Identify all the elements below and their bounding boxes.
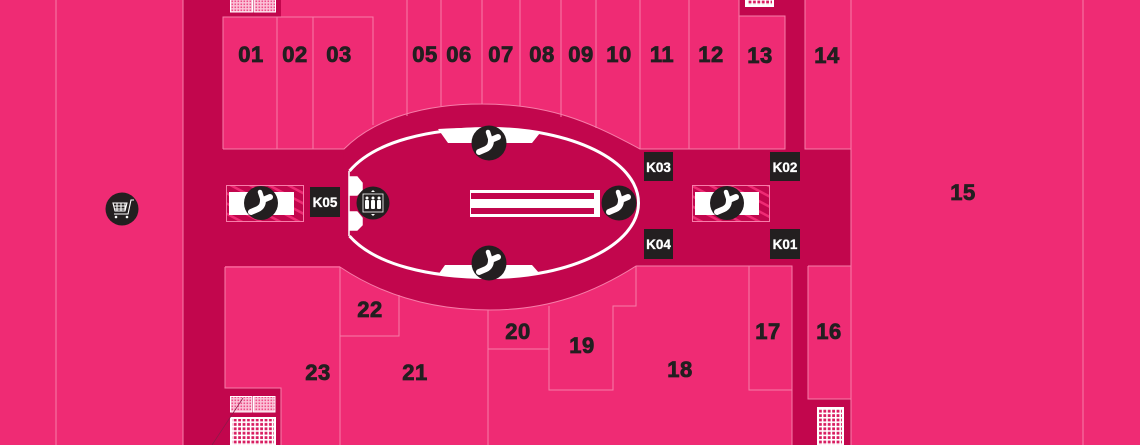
- icon: escalator centre: [602, 186, 636, 220]
- shop numbers: 20: [505, 319, 531, 344]
- shop numbers: 01: [238, 42, 264, 67]
- icon: shopping cart: [106, 192, 138, 226]
- shop numbers: 11: [650, 42, 674, 67]
- stairs top left: [230, 0, 276, 12]
- kiosk K04: [644, 229, 673, 259]
- icon: escalator right: [710, 186, 744, 220]
- shop numbers: 03: [326, 42, 352, 67]
- shop numbers: 07: [488, 42, 514, 67]
- kiosk K01: [770, 229, 800, 259]
- stairs bottom left: [212, 396, 275, 445]
- central escalator bar: [470, 190, 600, 217]
- shop numbers: 21: [402, 360, 428, 385]
- icon: escalator top: [472, 126, 506, 160]
- stairs bottom right: [818, 408, 843, 445]
- shop numbers: 16: [816, 319, 842, 344]
- shop numbers: 09: [568, 42, 594, 67]
- kiosk K02: K02: [773, 160, 797, 175]
- kiosk K01: K01: [773, 237, 798, 252]
- icon: lift: [356, 186, 390, 220]
- lift shaft wall: [349, 171, 362, 236]
- kiosk K05: [310, 187, 340, 217]
- kiosk K03: K03: [646, 160, 671, 175]
- top bridge: [438, 128, 540, 143]
- shop numbers: 18: [667, 357, 693, 382]
- kiosk K04: K04: [646, 237, 671, 252]
- shop numbers: 23: [305, 360, 331, 385]
- walkways: [183, 0, 851, 445]
- shop numbers: 10: [606, 42, 632, 67]
- kiosk K02: [770, 152, 800, 181]
- shop numbers: 13: [747, 43, 773, 68]
- right escalator hatch panel: [692, 186, 770, 222]
- kiosk K03: [644, 152, 673, 181]
- shop numbers: 19: [569, 333, 595, 358]
- shop numbers: 08: [529, 42, 555, 67]
- stairs top right: [746, 0, 773, 6]
- shop numbers: 06: [446, 42, 472, 67]
- atrium balustrade ring: [350, 128, 638, 278]
- left escalator hatch panel: [226, 186, 304, 222]
- shop numbers: 02: [282, 42, 308, 67]
- icon: escalator left: [244, 186, 278, 220]
- shop numbers: 15: [950, 180, 976, 205]
- shop numbers: 17: [755, 319, 781, 344]
- shop numbers: 14: [814, 43, 840, 68]
- shop numbers: 05: [412, 42, 438, 67]
- icon: escalator bottom: [472, 246, 506, 280]
- shop numbers: 12: [698, 42, 724, 67]
- shop numbers: [238, 42, 976, 385]
- bottom bridge: [438, 265, 540, 278]
- kiosk K05: K05: [313, 195, 338, 210]
- shop numbers: 22: [357, 297, 383, 322]
